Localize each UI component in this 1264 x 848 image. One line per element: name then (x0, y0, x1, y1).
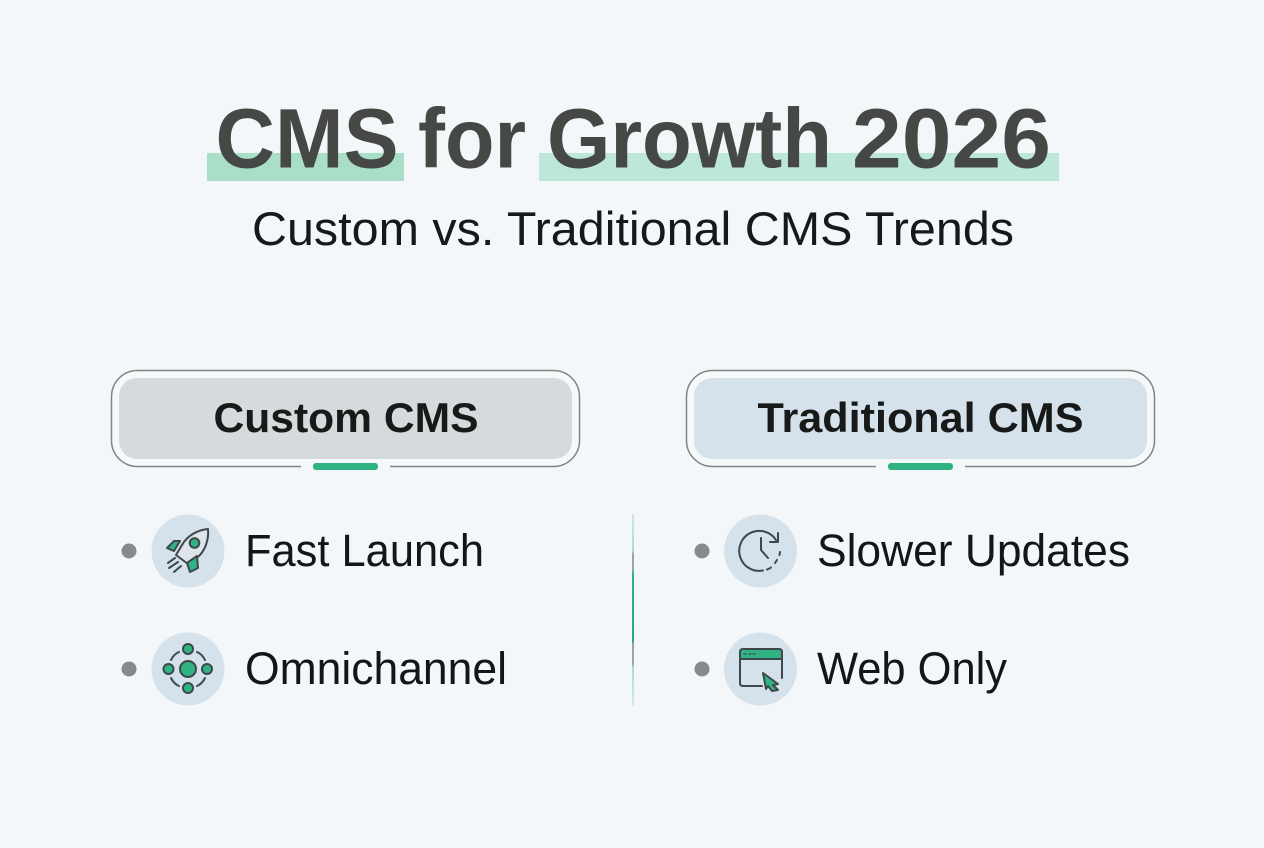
panel: custom CMS header (112, 370, 580, 471)
icon: browser window with cursor (740, 649, 782, 691)
list item: Fast Launch (122, 514, 484, 588)
list item: Slower Updates: Slower Updates (817, 525, 1130, 576)
title: CMS (216, 92, 398, 186)
center divider (632, 514, 634, 706)
subtitle: Custom vs. Traditional CMS Trends (252, 202, 1014, 255)
list item: Slower Updates (694, 514, 1130, 588)
icon: omnichannel nodes (164, 644, 212, 693)
list item: Omnichannel: Omnichannel (245, 643, 507, 694)
icon: clock (739, 531, 780, 571)
title: Growth (547, 92, 832, 186)
list item: Omnichannel (122, 632, 507, 706)
panel: traditional CMS header (686, 370, 1154, 471)
title (207, 92, 1059, 186)
panel: custom CMS header: Custom CMS (214, 394, 478, 441)
panel: traditional CMS header: Traditional CMS (758, 394, 1084, 441)
title: for (418, 92, 526, 186)
list item: Web Only (694, 632, 1007, 706)
title: 2026 (852, 92, 1051, 186)
list item: Fast Launch: Fast Launch (245, 525, 484, 576)
icon: rocket (167, 529, 208, 572)
list item: Web Only: Web Only (817, 643, 1007, 694)
